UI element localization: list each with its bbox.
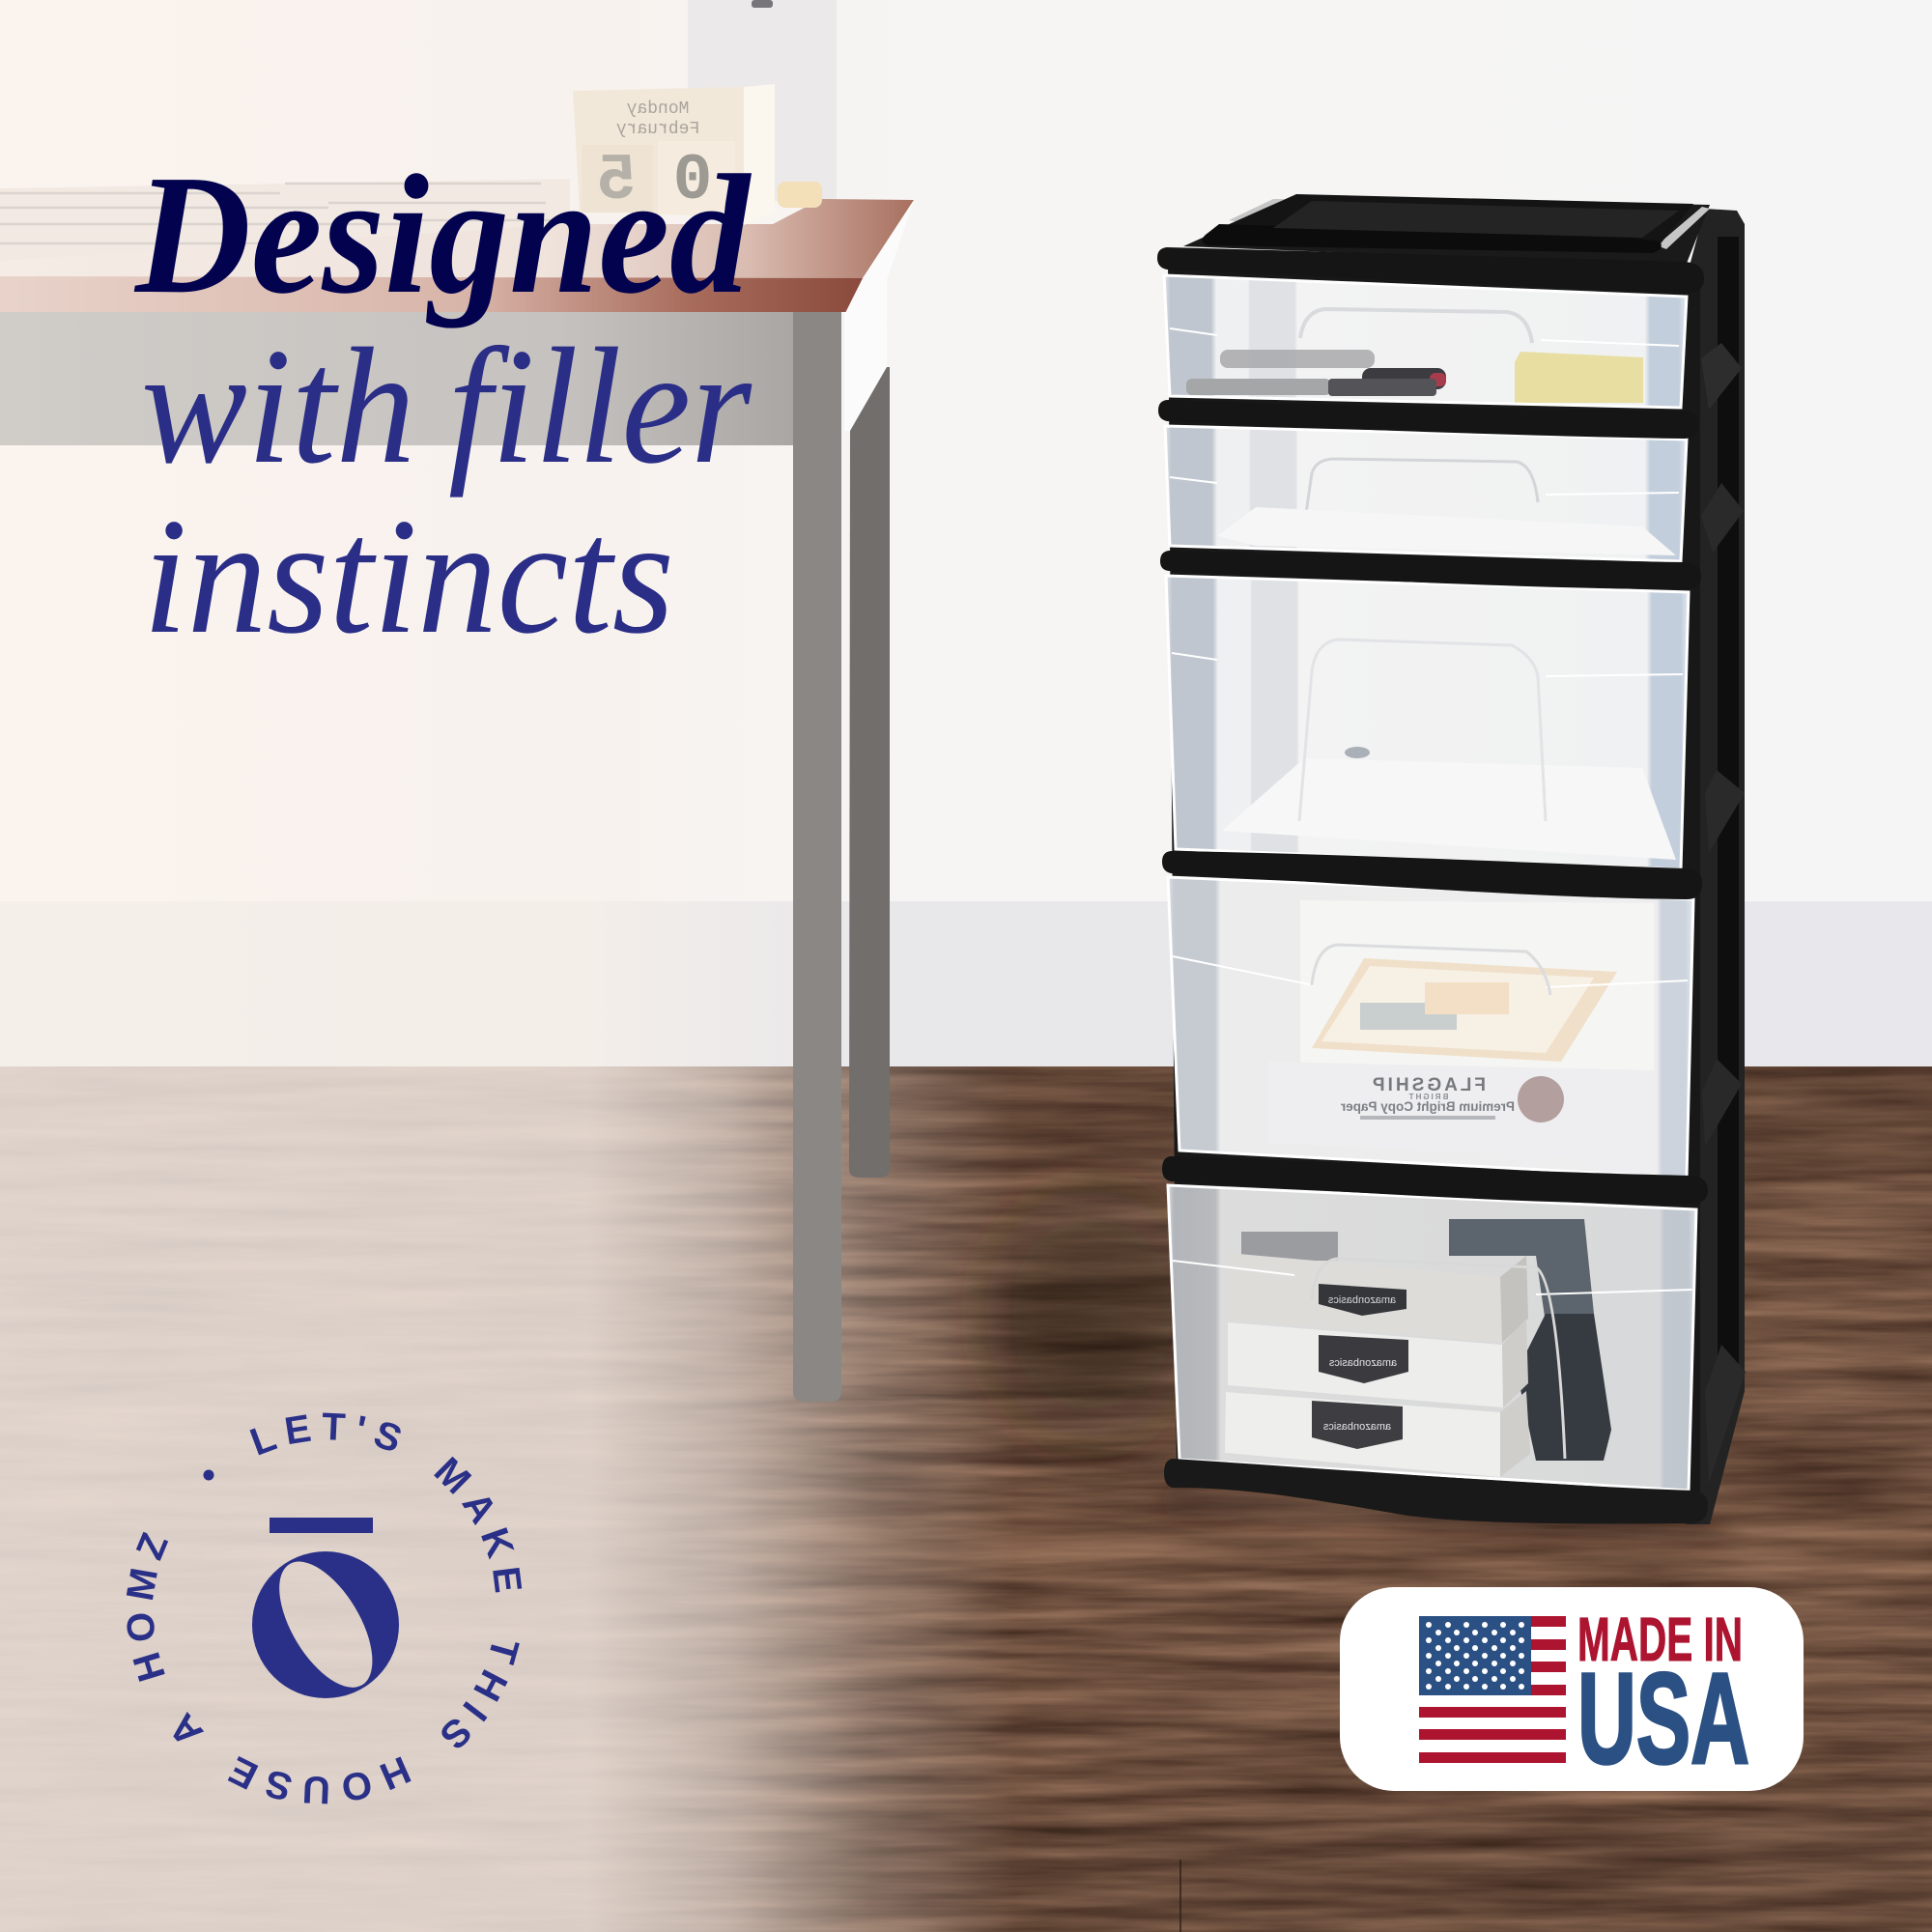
box 1 <box>1228 1253 1528 1343</box>
drawer handle <box>1312 1259 1565 1459</box>
floor shadow under drawer unit <box>1154 1488 1729 1546</box>
mirrored calendar month text: Monday <box>626 99 689 119</box>
black rim 1 <box>1157 247 1704 294</box>
drawer 1 <box>1164 275 1687 408</box>
item behind boxes <box>1241 1232 1338 1261</box>
drawer 5 edge <box>1168 1185 1696 1491</box>
separator dot <box>203 1470 214 1480</box>
background: baseboard <box>0 901 1932 1067</box>
desk front edge <box>0 276 863 312</box>
top tray <box>1202 194 1693 253</box>
soft left fade overlay <box>0 1066 1014 1932</box>
mirrored calendar date text: February <box>616 120 699 139</box>
envelope <box>1312 958 1617 1062</box>
desk with items <box>0 0 914 1402</box>
contents: sticky notes <box>1515 352 1643 403</box>
box 3 <box>1225 1391 1530 1477</box>
headline line 2 <box>141 315 753 498</box>
box 2 label: amazonbasics <box>1328 1357 1397 1369</box>
made in USA badge <box>1340 1587 1804 1791</box>
desk apron <box>0 312 795 445</box>
desk front leg <box>793 312 841 1402</box>
drawer 2 edge <box>1165 426 1687 561</box>
desk back leg <box>849 367 890 1178</box>
desk side panel <box>844 200 914 431</box>
unit side frame <box>1686 209 1746 1524</box>
tape roll <box>778 182 822 208</box>
stapler arm <box>1449 1219 1594 1323</box>
stapler base <box>1517 1314 1611 1461</box>
drawer 2 <box>1165 426 1687 561</box>
box 2 <box>1228 1319 1528 1407</box>
drawer 3 edge <box>1166 576 1689 869</box>
floor shadow beside drawer unit <box>985 1188 1198 1439</box>
mirrored box brand: FLAGSHIP <box>1370 1075 1486 1095</box>
headline line 1: Designed <box>133 140 752 329</box>
contents: gray marker <box>1220 350 1375 368</box>
badge background <box>1340 1587 1804 1791</box>
circular slogan: LET'S MAKE THIS HOUSE A HOMZ <box>126 1412 522 1804</box>
black rim 5 <box>1162 1156 1708 1204</box>
drawer 3 <box>1166 576 1689 869</box>
headline line 2: with <box>141 315 415 498</box>
drawer lip lines <box>1170 477 1679 495</box>
paper backing <box>1300 900 1654 1070</box>
drawer 4 edge <box>1168 877 1693 1178</box>
envelope inner <box>1321 966 1594 1053</box>
drawer lip lines <box>1173 956 1688 987</box>
drawer unit <box>1157 194 1746 1524</box>
drawer 5 <box>1168 1185 1696 1491</box>
black rim 3 <box>1160 551 1701 589</box>
drawer 1 edge <box>1164 275 1687 408</box>
contents: black marker <box>1362 368 1446 389</box>
box small print <box>1360 1116 1495 1120</box>
drawer floor band <box>1222 758 1676 860</box>
black bottom rim <box>1164 1459 1708 1523</box>
top surface <box>1183 196 1710 266</box>
unit back body <box>1168 261 1700 1507</box>
box 3 label: amazonbasics <box>1322 1421 1391 1433</box>
round logo badge <box>126 1412 522 1804</box>
paper box <box>1268 1062 1645 1160</box>
headline <box>133 140 753 668</box>
clock pin <box>752 0 773 8</box>
top surface silver edge left <box>1229 199 1285 222</box>
box emblem <box>1518 1076 1564 1122</box>
drawer handle <box>1299 639 1546 821</box>
desk top surface <box>0 199 914 278</box>
clock panel behind desk <box>688 0 837 201</box>
background: wood floor <box>0 1066 1932 1932</box>
drawer handle <box>1300 309 1532 343</box>
drawer handle <box>1304 459 1538 526</box>
mirrored digit 0: 0 <box>673 144 712 218</box>
black rim 4 <box>1162 851 1702 899</box>
desk calendar block <box>573 84 775 225</box>
contents: marker tip <box>1430 373 1446 386</box>
small feature <box>1345 747 1370 758</box>
background: wall <box>0 0 1932 903</box>
drawer floor band <box>1217 507 1676 555</box>
logo letter o <box>252 1551 399 1698</box>
mirrored digit 5: 5 <box>597 144 636 218</box>
USA text: USA <box>1577 1647 1749 1791</box>
contents: silver sharpie <box>1186 379 1331 395</box>
paper stack <box>0 179 570 266</box>
gray label <box>1360 1003 1457 1030</box>
headline line 2: filler <box>448 315 753 498</box>
made in text: MADE IN <box>1577 1605 1743 1674</box>
top surface silver edge right <box>1657 207 1710 249</box>
mirrored box description: Premium Bright Copy Paper <box>1340 1099 1515 1114</box>
headline line 3: instincts <box>143 485 674 668</box>
mirrored box subtitle: BRIGHT <box>1407 1093 1448 1101</box>
logo macron bar <box>270 1518 373 1533</box>
drawer lip lines <box>1173 1261 1692 1294</box>
drawer lip lines <box>1172 653 1683 676</box>
drawer lip lines <box>1170 328 1679 346</box>
black rim 2 <box>1158 400 1698 439</box>
peach label <box>1425 982 1509 1014</box>
drawer handle <box>1312 945 1550 995</box>
box 1 label: amazonbasics <box>1327 1294 1396 1306</box>
American flag <box>1419 1616 1566 1763</box>
drawer 4 <box>1168 877 1693 1178</box>
contents: sharpie cap <box>1328 379 1436 396</box>
